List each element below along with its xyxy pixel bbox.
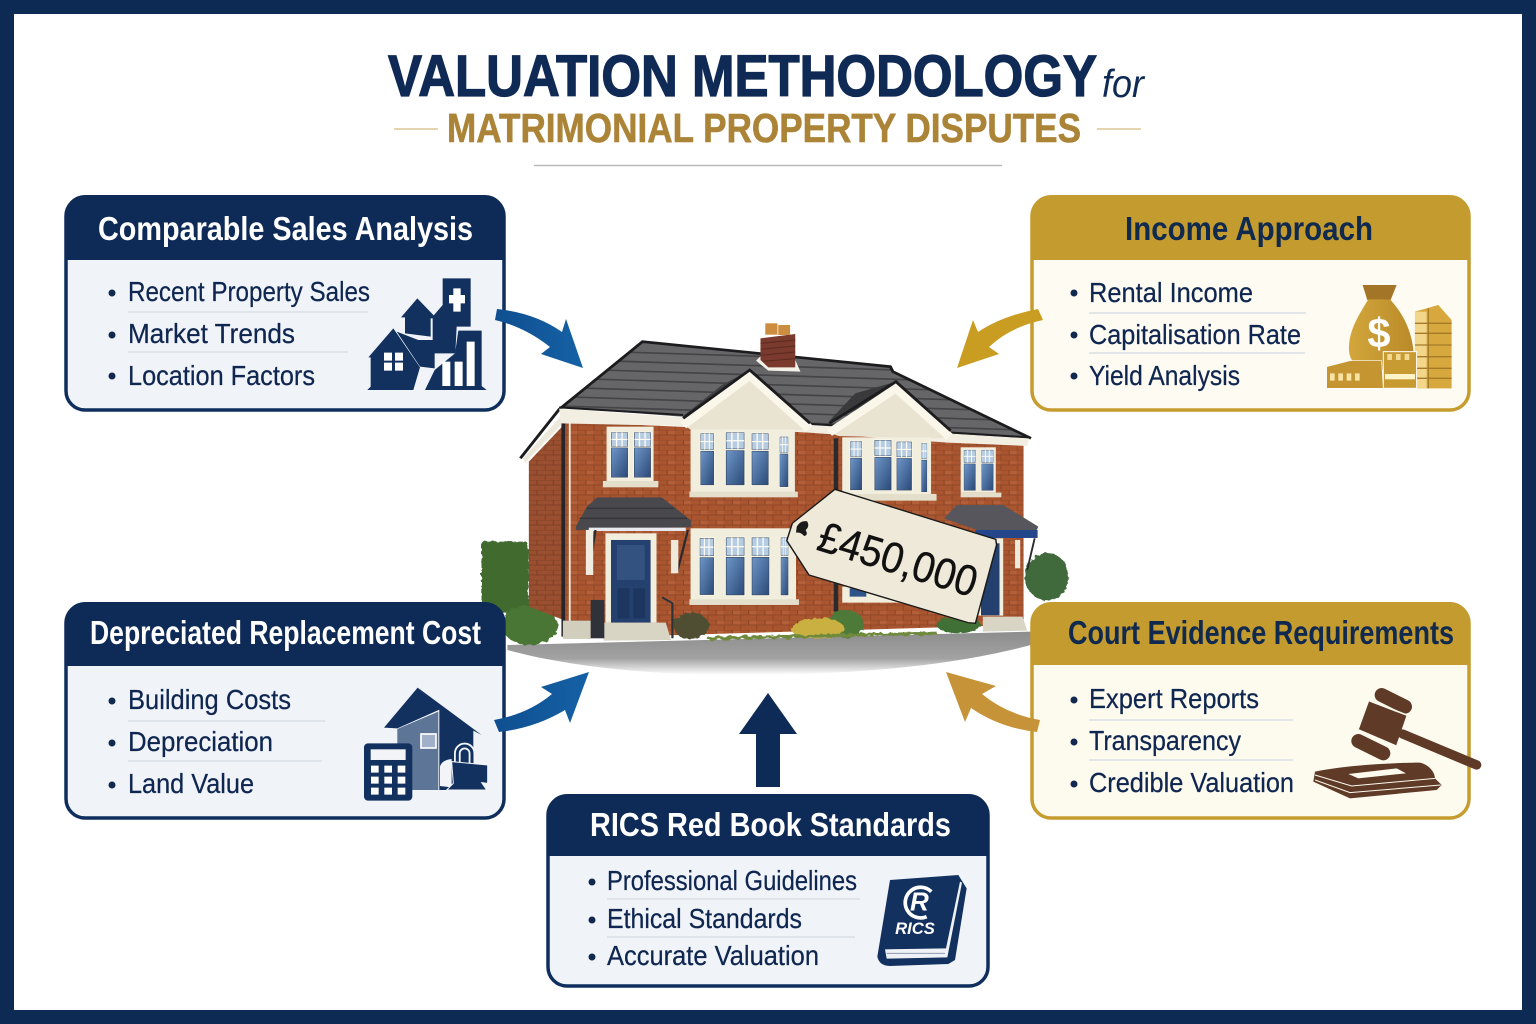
arrow: RICS standards to house: [739, 693, 797, 787]
panel: comparable sales analysis: [65, 195, 505, 410]
list: income approach: Rental Income: [1089, 277, 1253, 308]
list: depreciated replacement cost: [108, 684, 325, 799]
heading: RICS red book standards: RICS Red Book Standards: [590, 806, 951, 843]
roof: [520, 341, 1033, 463]
icon: RICS book: R: [910, 887, 929, 917]
panel: depreciated replacement cost: [65, 602, 505, 818]
icon: RICS book: [877, 875, 967, 966]
icon: money bag and buildings: [1327, 285, 1452, 388]
list: RICS red book standards: Professional Guidelines: [607, 865, 857, 896]
price tag label: £450,000: [812, 513, 983, 607]
heading: depreciated replacement cost: Depreciated Replacement Cost: [90, 614, 481, 651]
panel: income approach: [1031, 195, 1470, 410]
icon: RICS book: RICS: [895, 919, 935, 938]
icon: gavel: [1313, 695, 1477, 798]
list: RICS red book standards: Accurate Valuation: [607, 940, 819, 971]
right porch and door: [944, 505, 1038, 632]
icon: money bag and buildings: $: [1367, 309, 1391, 356]
list: court evidence requirements: Expert Reports: [1089, 683, 1259, 714]
list: RICS red book standards: [588, 865, 860, 971]
list: comparable sales analysis: Market Trends: [128, 318, 295, 349]
heading: court evidence requirements: Court Evidence Requirements: [1068, 614, 1454, 651]
hedges and shrubs: [482, 542, 1068, 645]
arrow: court evidence to house: [946, 672, 1040, 732]
list: income approach: [1070, 277, 1306, 391]
front gables: [683, 370, 951, 438]
list: income approach: Capitalisation Rate: [1089, 319, 1301, 350]
panel: court evidence requirements: [1031, 602, 1477, 818]
windows: [603, 427, 1001, 605]
list: income approach: Yield Analysis: [1089, 360, 1240, 391]
arrow: comparable sales to house: [495, 309, 583, 368]
list: depreciated replacement cost: Land Value: [128, 768, 254, 799]
heading: comparable sales analysis: Comparable Sales Analysis: [98, 210, 473, 247]
central house illustration: [482, 323, 1068, 675]
list: RICS red book standards: Ethical Standards: [607, 903, 802, 934]
front door and porch: [563, 497, 691, 641]
brick walls: [529, 417, 1024, 638]
subtitle: MATRIMONIAL PROPERTY DISPUTES: [447, 105, 1081, 151]
list: court evidence requirements: [1070, 683, 1294, 798]
list: court evidence requirements: Credible Valuation: [1089, 767, 1294, 798]
front garden shrubs: [674, 610, 981, 639]
list: depreciated replacement cost: Building Costs: [128, 684, 291, 715]
title: for: [1102, 63, 1146, 106]
arrow: depreciated cost to house: [494, 672, 589, 732]
price tag shape: [787, 489, 997, 623]
list: depreciated replacement cost: Depreciation: [128, 726, 273, 757]
icon: house, calculator and padlock: [364, 688, 488, 801]
panel: RICS red book standards: [547, 794, 989, 986]
arrow: income approach to house: [957, 309, 1043, 368]
list: comparable sales analysis: Recent Property Sales: [128, 276, 370, 307]
chimney: [756, 323, 800, 372]
icon: houses and bar chart: [367, 278, 487, 390]
list: court evidence requirements: Transparency: [1089, 725, 1241, 756]
title: VALUATION METHODOLOGY: [388, 44, 1097, 109]
ground: [507, 632, 1031, 675]
list: comparable sales analysis: Location Factors: [128, 360, 315, 391]
list: comparable sales analysis: [108, 276, 370, 391]
heading: income approach: Income Approach: [1125, 210, 1373, 247]
